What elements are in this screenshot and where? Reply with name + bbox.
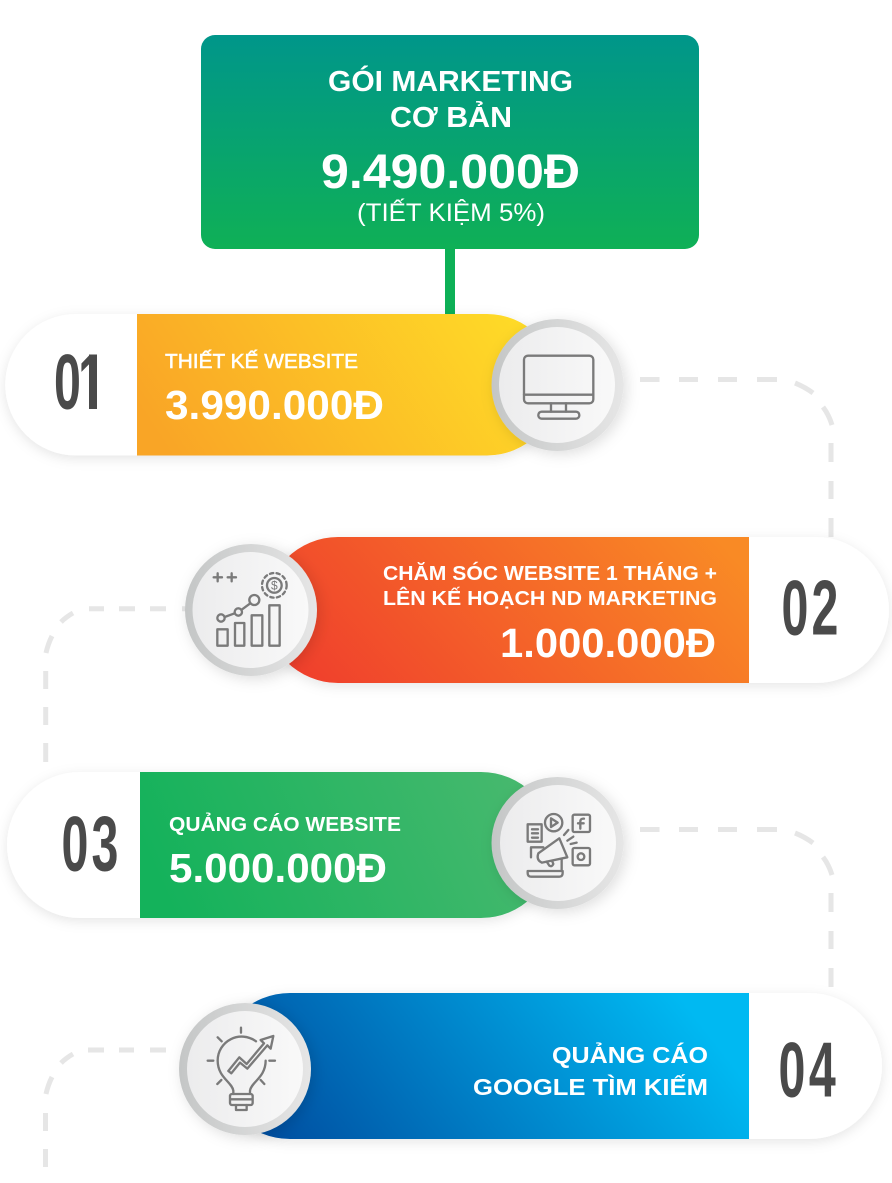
icon: light bulb with rising arrow [179, 1003, 311, 1135]
step 2 label [383, 561, 717, 610]
connector: dashed path continuing below step 4 [46, 1050, 166, 1167]
icon: growth chart with dollar coin [185, 544, 317, 676]
package price: 9.490.000Đ [321, 146, 580, 199]
heading: package name [328, 64, 573, 134]
step number 01: 0 [54, 338, 81, 425]
icon: monitor [492, 319, 624, 451]
connector: dashed path from step 3 to step 4 [640, 830, 832, 987]
connector: green line from header to step 1 [445, 245, 455, 317]
step 2 price: 1.000.000Đ [500, 620, 716, 666]
step number 04: 0 [778, 1026, 805, 1113]
heading: package name: CƠ BẢN [390, 100, 512, 134]
step 2 label: CHĂM SÓC WEBSITE 1 THÁNG + [383, 561, 717, 585]
step 1 label: THIẾT KẾ WEBSITE [165, 350, 358, 373]
step number 04: 4 [809, 1026, 836, 1113]
step 4 label: GOOGLE TÌM KIẾM [473, 1073, 708, 1100]
icon: megaphone and social media [492, 777, 624, 909]
step 3 price: 5.000.000Đ [169, 845, 387, 891]
step 1 price: 3.990.000Đ [165, 382, 384, 428]
connector: dashed path from step 2 to step 3 [46, 609, 190, 762]
step number 02: 0 [782, 564, 808, 651]
step 3 label: QUẢNG CÁO WEBSITE [169, 813, 401, 836]
step 4 label [473, 1040, 708, 1100]
heading: package name: GÓI MARKETING [328, 64, 573, 98]
panel: step 2 website care and content planning [265, 537, 889, 683]
step 4 label: QUẢNG CÁO [552, 1040, 708, 1068]
step number 01: 1 [78, 338, 105, 425]
step number 01 [54, 338, 108, 425]
panel: step 3 website advertising [7, 772, 554, 918]
panel: step 1 website design [5, 314, 558, 456]
step number 03: 3 [92, 800, 118, 887]
savings note: (TIẾT KIỆM 5%) [357, 198, 545, 227]
panel: step 4 Google search advertising [217, 993, 882, 1139]
icon: growth chart with dollar coin: $ [271, 579, 278, 593]
connector: dashed path from step 1 to step 2 [640, 380, 832, 537]
step 2 label: LÊN KẾ HOẠCH ND MARKETING [383, 586, 717, 610]
step number 02: 2 [812, 564, 838, 651]
step number 03: 0 [62, 800, 88, 887]
panel: package header [201, 35, 699, 249]
